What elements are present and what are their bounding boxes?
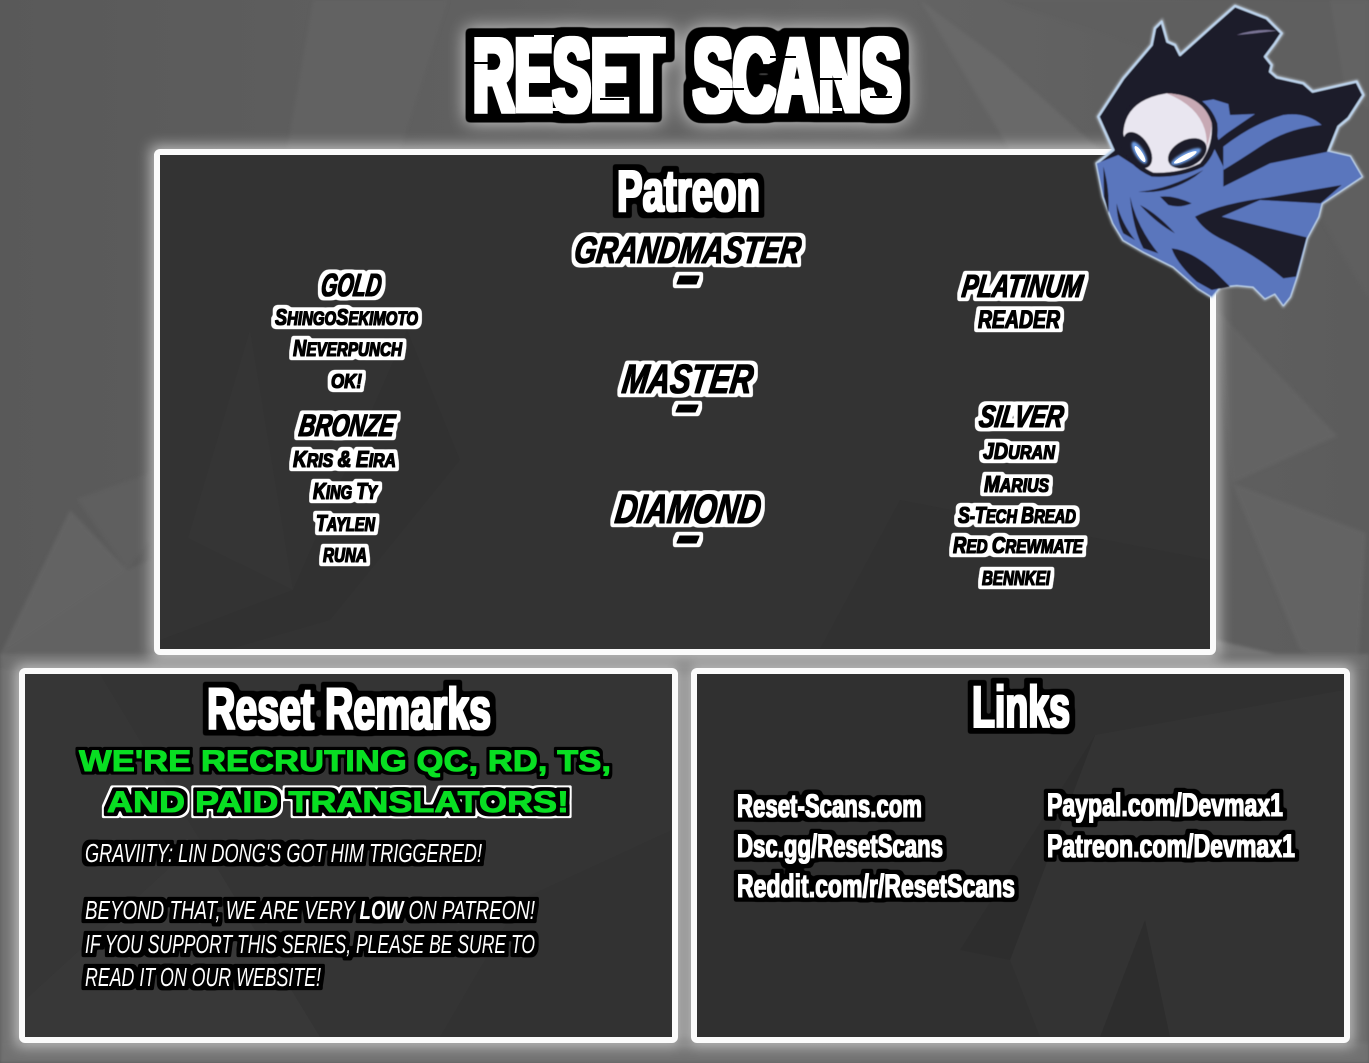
tier: bronze: TAYLEN <box>316 510 376 536</box>
text block: patreon appeal <box>85 895 535 992</box>
heading: patreon: Patreon <box>617 159 760 224</box>
tier: silver: MARIUS <box>984 471 1049 497</box>
tier: bronze: KRIS & EIRA <box>293 446 396 472</box>
links: left column: Dsc.gg/ResetScans <box>737 828 943 864</box>
heading: reset remarks: Reset Remarks <box>207 677 491 742</box>
tier: silver: RED CREWMATE <box>953 532 1084 558</box>
tier: silver: SILVER <box>977 399 1066 434</box>
tier: silver: BENNKEI <box>982 568 1050 590</box>
text block: patreon appeal: IF YOU SUPPORT THIS SERIES, PLEASE BE SURE TO <box>85 929 535 959</box>
tier: bronze: RUNA <box>323 545 367 567</box>
tier: gold: SHINGOSEKIMOTO <box>275 304 418 330</box>
links: left column: Reddit.com/r/ResetScans <box>737 868 1015 904</box>
links: left column <box>737 788 1015 904</box>
text block: patreon appeal: READ IT ON OUR WEBSITE! <box>85 962 321 992</box>
links: right column: Paypal.com/Devmax1 <box>1047 787 1283 823</box>
tier: gold <box>275 267 418 393</box>
panel: patreon <box>157 152 1213 652</box>
tier: gold: NEVERPUNCH <box>293 335 403 361</box>
tier: master: MASTER <box>620 356 756 402</box>
callout: recruiting <box>79 745 611 819</box>
tier: diamond <box>613 486 764 543</box>
callout: recruiting: WE'RE RECRUTING QC, RD, TS, <box>79 745 611 778</box>
title: SCANS <box>693 18 901 134</box>
tier: diamond: DIAMOND <box>613 486 764 532</box>
text block: gravity note: GRAVIITY: LIN DONG'S GOT HIM TRIGGERED! <box>85 838 482 868</box>
text block: patreon appeal: BEYOND THAT, WE ARE VERY LOW ON PATREON! <box>85 895 535 925</box>
tier: gold: GOLD <box>319 267 384 303</box>
tier: platinum <box>960 268 1086 334</box>
links: left column: Reset-Scans.com <box>737 788 922 824</box>
panel: reset remarks <box>22 671 675 1040</box>
title: RESET <box>473 18 664 134</box>
tier: gold: OK! <box>331 371 362 393</box>
tier: platinum: PLATINUM <box>960 268 1086 304</box>
tier: bronze <box>293 408 398 567</box>
heading: links: Links <box>972 675 1070 740</box>
tier: silver <box>953 399 1084 590</box>
panel: links <box>694 671 1347 1040</box>
callout: recruiting: AND PAID TRANSLATORS! <box>107 786 569 819</box>
tier: grandmaster: GRANDMASTER <box>572 229 804 272</box>
icon: hooded mascot <box>1097 6 1363 305</box>
tier: bronze: KING TY <box>313 478 379 504</box>
links: right column <box>1047 787 1295 864</box>
tier: master <box>620 356 756 412</box>
tier: platinum: READER <box>978 306 1060 334</box>
tier: silver: JDURAN <box>983 438 1056 464</box>
tier: bronze: BRONZE <box>297 408 398 443</box>
tier: silver: S-TECH BREAD <box>958 502 1076 528</box>
tier: grandmaster <box>572 229 804 284</box>
